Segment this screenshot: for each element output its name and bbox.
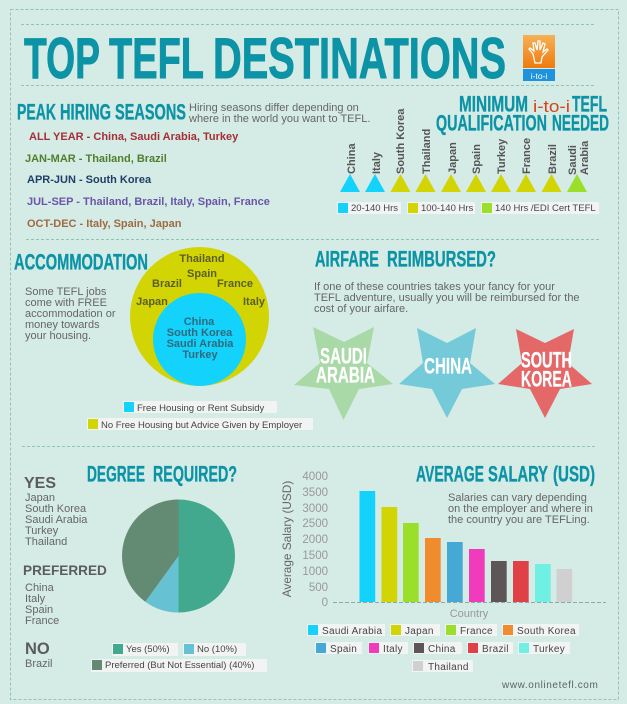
legend: countries: Japan [405, 626, 434, 637]
text: preferred list: China [25, 582, 55, 594]
legend: countries: Italy [383, 644, 403, 655]
chart: nested housing circles: Thailand [179, 253, 225, 265]
bar chart: salary by country: 3500 [302, 487, 328, 499]
chart: qualification triangles: Spain [471, 144, 483, 174]
legend: degree [91, 643, 267, 672]
star: South Korea [498, 329, 592, 418]
chart: qualification triangles: Arabia [579, 140, 591, 175]
legend: qualification hours: 100-140 Hrs [421, 203, 474, 214]
heading: degree required: REQUIRED? [153, 462, 237, 486]
bar chart: salary by country: 1000 [302, 566, 328, 578]
chart: nested housing circles [130, 247, 269, 386]
text: no list: NO [25, 640, 50, 658]
chart: qualification triangles: Saudi [567, 145, 579, 175]
heading: average salary: SALARY [488, 462, 548, 486]
text: salary intro: Salaries can vary depending [448, 492, 587, 504]
bar chart: salary by country: 4000 [302, 471, 328, 483]
panel: airfare reimbursed [294, 246, 592, 420]
chart: nested housing circles: Spain [187, 268, 217, 280]
chart: qualification triangles: Japan [447, 142, 459, 174]
chart: qualification triangles: Italy [371, 151, 383, 174]
panel: average salary [280, 462, 606, 691]
title: DESTINATIONS [213, 27, 506, 91]
heading: minimum i-to-i TEFL qualification needed [436, 92, 609, 136]
bar chart: salary by country: 0 [322, 597, 328, 609]
legend: degree: No (10%) [197, 644, 237, 655]
title: TOP [24, 27, 100, 91]
chart: nested housing circles: Japan [136, 296, 168, 308]
text: season list: ALL YEAR - China, Saudi Arabia, Turkey [29, 131, 239, 143]
panel: minimum qualification [337, 92, 609, 214]
legend: countries: Saudi Arabia [322, 626, 382, 637]
text: preferred list: France [25, 615, 59, 627]
legend: degree: Preferred (But Not Essential) (40%) [105, 660, 254, 671]
legend: housing: No Free Housing but Advice Given by Employer [101, 420, 302, 431]
text: preferred list [23, 563, 107, 627]
text: accommodation intro: Some TEFL jobs [25, 286, 107, 298]
text: preferred list: PREFERRED [23, 563, 107, 578]
legend: housing: Free Housing or Rent Subsidy [137, 403, 265, 414]
chart: nested housing circles: Saudi Arabia [167, 338, 234, 350]
panel: peak hiring seasons [17, 100, 370, 230]
text: salary intro: on the employer and where in [448, 503, 593, 515]
heading: minimum i-to-i TEFL qualification needed: QUALIFICATION [436, 110, 547, 136]
pie chart: degree required [122, 500, 235, 612]
chart: qualification triangles: Thailand [421, 129, 433, 174]
chart: qualification triangles: France [521, 138, 533, 174]
legend: degree: Yes (50%) [126, 644, 169, 655]
heading: degree required: DEGREE [87, 462, 145, 486]
icon: i-to-i logo: i-to-i [531, 71, 547, 81]
text: season list: JUL-SEP - Thailand, Brazil, Italy, Spain, France [27, 196, 270, 208]
legend: countries [307, 624, 579, 673]
legend: housing [87, 401, 313, 431]
legend: countries: Turkey [533, 644, 565, 655]
heading: peak hiring seasons [17, 100, 186, 124]
star: China [399, 328, 495, 418]
text: yes list [24, 475, 88, 548]
text: preferred list: Spain [25, 604, 53, 616]
chart: qualification triangles: Turkey [496, 138, 508, 174]
bar chart: salary by country [280, 471, 606, 620]
text: preferred list: Italy [25, 593, 46, 605]
legend: qualification hours [337, 202, 599, 214]
text: season list: JAN-MAR - Thailand, Brazil [25, 153, 167, 165]
star: South Korea: SOUTH [521, 348, 572, 372]
heading: airfare reimbursed: REIMBURSED? [387, 246, 496, 272]
chart: nested housing circles: South Korea [167, 327, 233, 339]
heading: minimum i-to-i TEFL qualification needed: MINIMUM [459, 92, 528, 116]
chart: nested housing circles: Brazil [152, 278, 182, 290]
legend: countries: France [460, 626, 493, 637]
text: yes list: Turkey [25, 525, 59, 537]
star: South Korea: KOREA [521, 366, 572, 392]
heading: average salary: AVERAGE [416, 462, 484, 486]
text: accommodation intro: money towards [25, 319, 100, 331]
heading: airfare reimbursed: AIRFARE [315, 246, 379, 272]
text: website credit: www.onlinetefl.com [501, 680, 598, 691]
bar chart: salary by country: 500 [309, 582, 328, 594]
text: yes list: Saudi Arabia [25, 514, 88, 526]
chart: nested housing circles: China [184, 316, 215, 328]
bar chart: salary by country: 1500 [302, 550, 328, 562]
chart: qualification triangles: South Korea [395, 108, 407, 174]
chart: qualification triangles: Brazil [547, 144, 559, 174]
bar chart: salary by country: 2000 [302, 534, 328, 546]
heading: minimum i-to-i TEFL qualification needed: i-to-i [533, 97, 570, 116]
text: no list: Brazil [25, 658, 53, 670]
legend: countries: Brazil [482, 644, 509, 655]
text: accommodation intro: your housing. [25, 330, 91, 342]
legend: countries: Thailand [428, 662, 469, 673]
star: China: CHINA [424, 354, 472, 378]
text: airfare intro: If one of these countries takes your fancy for your [314, 281, 555, 293]
bar chart: salary by country: 3000 [302, 503, 328, 515]
text: accommodation intro: come with FREE [25, 297, 107, 309]
chart: qualification triangles: China [346, 143, 358, 174]
panel: degree required [23, 462, 267, 672]
text: hiring intro: where in the world you want to TEFL. [188, 113, 370, 125]
star: Saudi Arabia [294, 327, 393, 420]
chart: qualification triangles [340, 108, 591, 192]
legend: countries: South Korea [517, 626, 576, 637]
text: season list [25, 131, 270, 230]
text: yes list: South Korea [25, 503, 87, 515]
text: airfare intro: cost of your airfare. [314, 303, 408, 315]
heading: average salary: (USD) [553, 462, 595, 486]
chart: nested housing circles: Italy [243, 296, 266, 308]
title: TEFL [109, 27, 204, 91]
bar chart: salary by country: Average Salary (USD) [280, 481, 294, 597]
text: season list: OCT-DEC - Italy, Spain, Japan [27, 218, 182, 230]
text: salary intro: the country you are TEFLing. [448, 514, 590, 526]
legend: qualification hours: 140 Hrs /EDI Cert TEFL [495, 203, 596, 214]
heading: accommodation: ACCOMMODATION [14, 250, 148, 274]
panel: accommodation [14, 247, 313, 431]
heading: peak hiring seasons: PEAK [17, 100, 56, 124]
heading: minimum i-to-i TEFL qualification needed: TEFL [572, 92, 607, 116]
heading: peak hiring seasons: HIRING [60, 100, 111, 124]
heading: average salary [416, 462, 595, 486]
heading: degree required [87, 462, 237, 486]
text: hiring intro: Hiring seasons differ depending on [189, 102, 359, 114]
title [24, 27, 506, 91]
bar chart: salary by country: 2500 [302, 518, 328, 530]
heading: peak hiring seasons: SEASONS [115, 100, 186, 124]
chart: nested housing circles: Turkey [182, 349, 219, 361]
text: no list [25, 640, 53, 670]
bar chart: salary by country: Country [450, 608, 489, 620]
text: airfare intro: TEFL adventure, usually you will be reimbursed for the [314, 292, 580, 304]
heading: airfare reimbursed [315, 246, 496, 272]
text: yes list: Japan [25, 492, 55, 504]
icon: i-to-i logo [523, 35, 555, 81]
text: season list: APR-JUN - South Korea [27, 174, 152, 186]
text: accommodation intro: accommodation or [25, 308, 116, 320]
chart: nested housing circles: France [217, 278, 253, 290]
legend: countries: Spain [330, 644, 357, 655]
legend: countries: China [428, 644, 456, 655]
text: yes list: YES [24, 475, 56, 492]
star: Saudi Arabia: SAUDI [320, 344, 367, 368]
text: yes list: Thailand [25, 536, 67, 548]
star: Saudi Arabia: ARABIA [316, 362, 375, 388]
legend: qualification hours: 20-140 Hrs [351, 203, 398, 214]
